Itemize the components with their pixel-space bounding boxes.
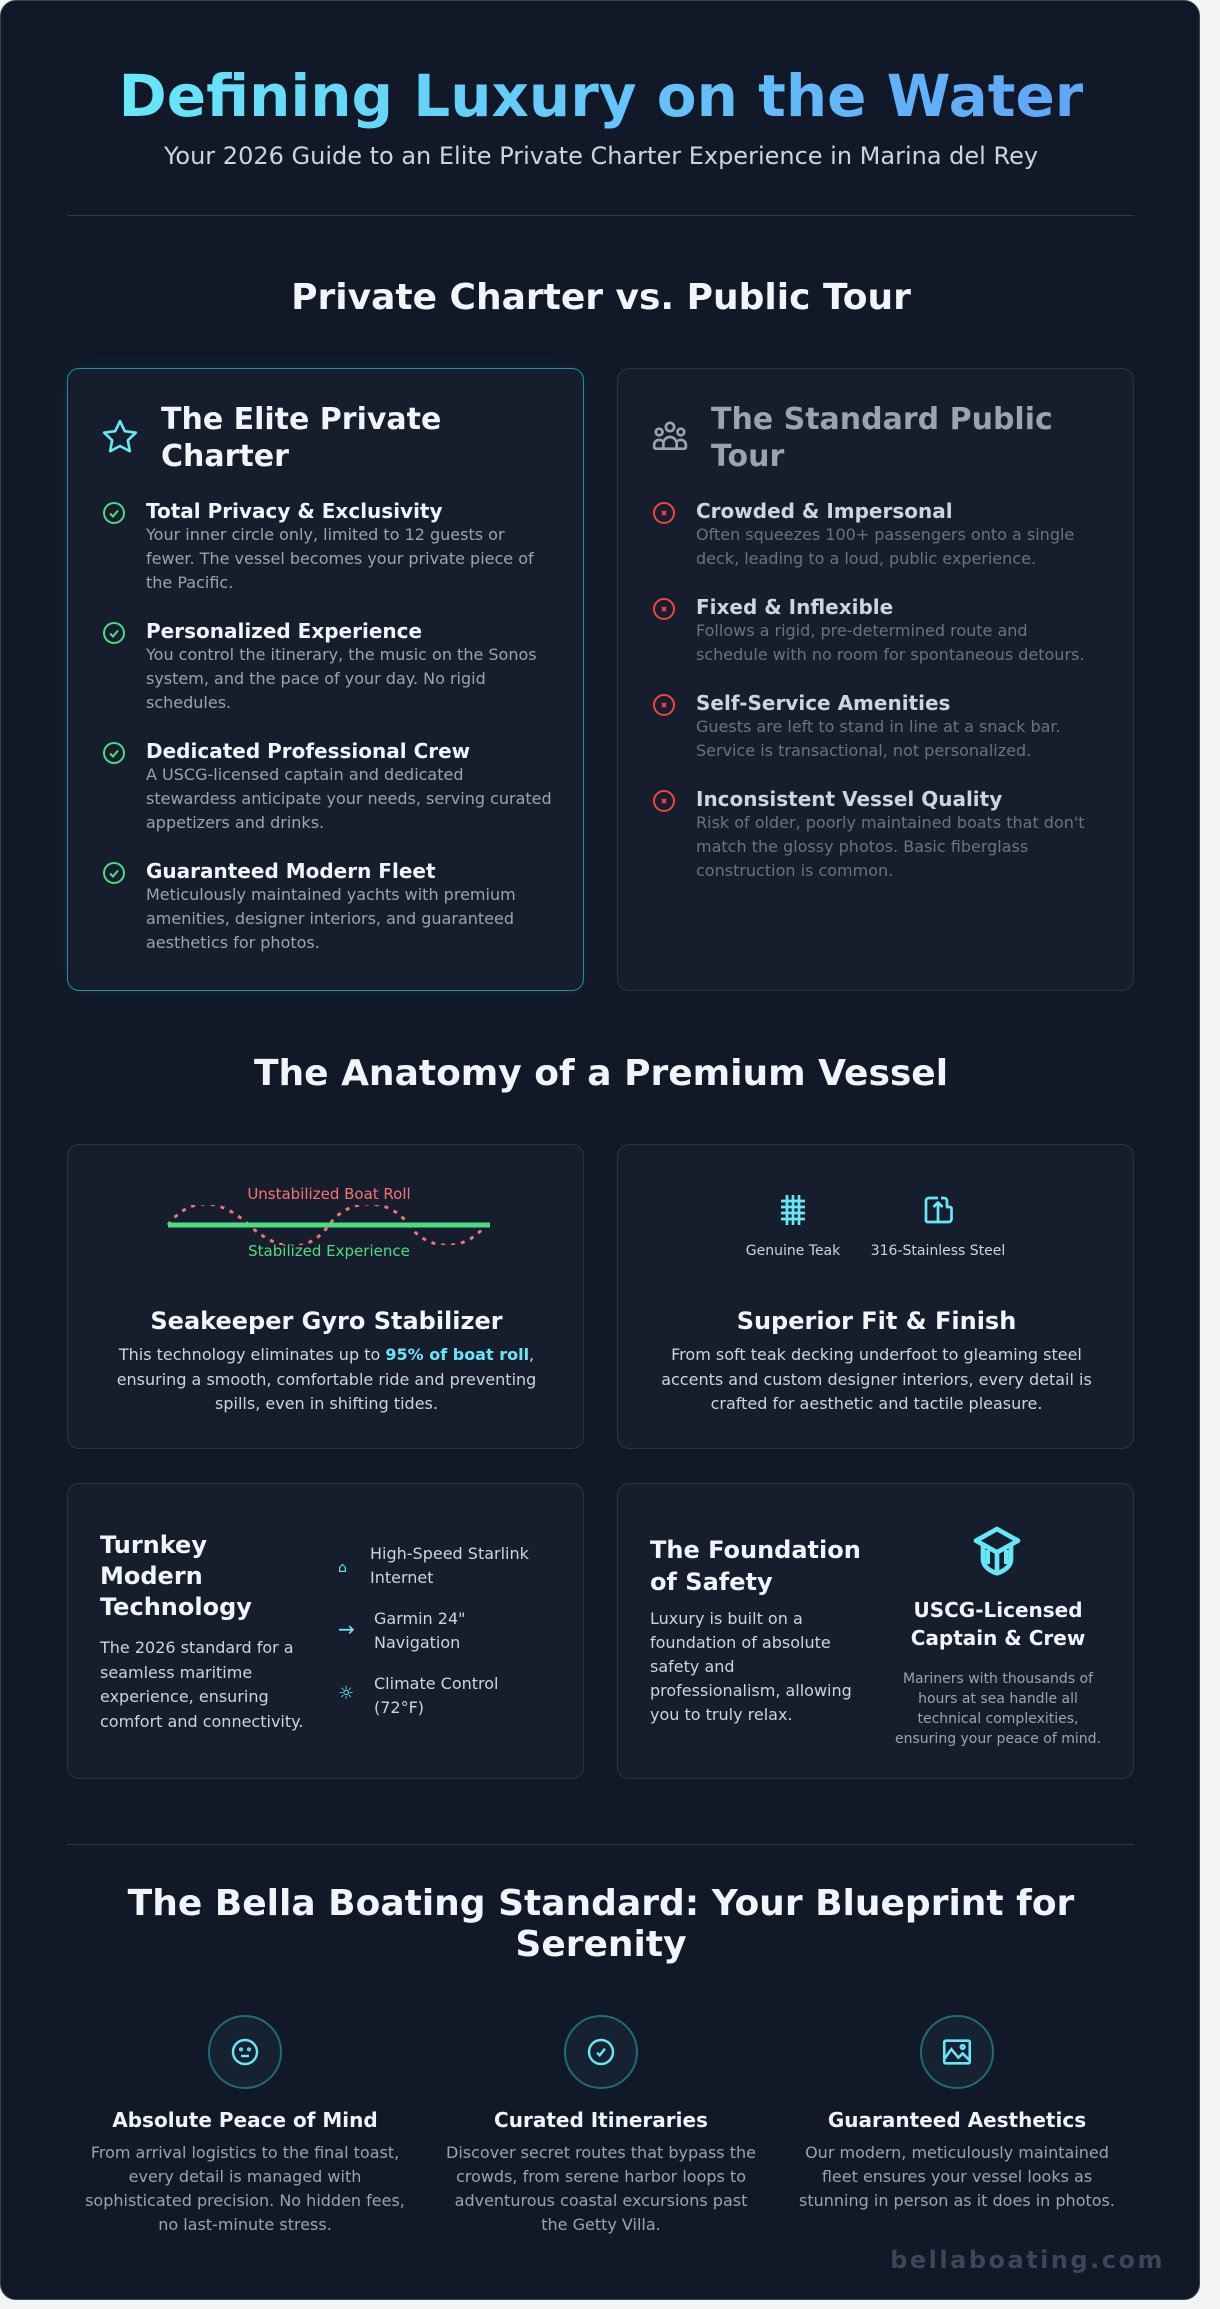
card title	[100, 1531, 252, 1621]
column: guaranteed aesthetics	[799, 2015, 1115, 2210]
item: crew: A USCG-licensed captain and dedicated stewardess anticipate your needs, serving curated appetizers and drinks.	[146, 765, 552, 832]
item: personalized	[103, 619, 537, 712]
item: quality	[653, 787, 1085, 880]
column: guaranteed aesthetics: Our modern, meticulously maintained fleet ensures your vessel looks as stunning in person as it does in photos.	[799, 2143, 1115, 2210]
crew title: USCG-Licensed	[913, 1598, 1083, 1622]
item: quality: Risk of older, poorly maintained boats that don't match the glossy photos. Basic fiberglass construction is common.	[696, 813, 1085, 880]
panel: safety	[617, 1483, 1134, 1779]
card text: This technology eliminates up to 95% of boat roll, ensuring a smooth, comfortable ride and preventing spills, even in shifting tides.	[117, 1345, 536, 1413]
item: privacy: Your inner circle only, limited to 12 guests or fewer. The vessel becomes your private piece of the Pacific.	[146, 525, 534, 592]
item: fleet: Guaranteed Modern Fleet	[146, 859, 436, 883]
card title: Technology	[100, 1593, 252, 1621]
item: self-service: Self-Service Amenities	[696, 691, 950, 715]
panel title: The Elite Private	[161, 402, 441, 437]
panel title: The Standard Public	[711, 402, 1053, 437]
item: climate: Climate Control (72°F)	[374, 1674, 498, 1717]
panel title: Charter	[161, 439, 289, 474]
panel title	[161, 402, 441, 474]
card text: Luxury is built on a foundation of absolute safety and professionalism, allowing you to truly relax.	[650, 1609, 852, 1724]
item: crowded	[653, 499, 1074, 568]
icon: check circle	[564, 2015, 638, 2089]
column: curated itineraries: Discover secret routes that bypass the crowds, from serene harbor loops to adventurous coastal excursions past the Getty Villa.	[446, 2143, 756, 2234]
icon: calm face	[208, 2015, 282, 2089]
icon: steel: 316-Stainless Steel	[871, 1243, 1005, 1259]
item: garmin: Garmin 24" Navigation	[374, 1609, 465, 1652]
panel: gyro stabilizer	[67, 1144, 584, 1449]
card title: Seakeeper Gyro Stabilizer	[150, 1307, 503, 1335]
card title: Superior Fit & Finish	[737, 1307, 1016, 1335]
panel: standard public tour	[617, 368, 1134, 991]
crew text: Mariners with thousands of hours at sea handle all technical complexities, ensuring your peace of mind.	[895, 1671, 1101, 1747]
icon: teak	[746, 1195, 840, 1259]
panel: elite private charter	[67, 368, 584, 991]
item: self-service: Guests are left to stand in line at a snack bar. Service is transactional, not personalized.	[696, 717, 1061, 760]
chart: boat roll	[166, 1185, 490, 1260]
icon: teak: Genuine Teak	[746, 1243, 840, 1259]
subtitle: Your 2026 Guide to an Elite Private Charter Experience in Marina del Rey	[164, 142, 1038, 170]
item: fleet	[103, 859, 516, 952]
heading: anatomy: The Anatomy of a Premium Vessel	[254, 1053, 948, 1094]
item: garmin: →	[338, 1617, 355, 1641]
column: peace of mind: From arrival logistics to the final toast, every detail is managed with sophisticated precision. No hidden fees, no last-minute stress.	[85, 2143, 405, 2234]
item: fixed: Follows a rigid, pre-determined route and schedule with no room for spontaneous detours.	[696, 621, 1084, 664]
panel: modern technology	[67, 1483, 584, 1779]
chart: boat roll: Unstabilized Boat Roll	[247, 1185, 411, 1203]
card title	[650, 1536, 861, 1596]
list: tech features	[338, 1544, 529, 1717]
icon: people	[652, 422, 688, 450]
crew title: Captain & Crew	[911, 1626, 1085, 1650]
heading: comparison: Private Charter vs. Public Tour	[291, 277, 911, 318]
heading: bella boating standard: The Bella Boating Standard: Your Blueprint for Serenity	[128, 1883, 1074, 1965]
column: curated itineraries	[446, 2015, 756, 2234]
item: personalized: Personalized Experience	[146, 619, 422, 643]
item: starlink: High-Speed Starlink Internet	[370, 1544, 529, 1587]
item: privacy	[103, 499, 534, 592]
card title: Modern	[100, 1562, 203, 1590]
icon: steel	[871, 1196, 1005, 1259]
card title: The Foundation	[650, 1536, 861, 1564]
column: peace of mind: Absolute Peace of Mind	[112, 2108, 378, 2132]
item: personalized: You control the itinerary, the music on the Sonos system, and the pace of your day. No rigid schedules.	[146, 645, 537, 712]
crew title	[911, 1598, 1085, 1650]
column: guaranteed aesthetics: Guaranteed Aesthetics	[828, 2108, 1086, 2132]
panel: fit & finish	[617, 1144, 1134, 1449]
item: crew: Dedicated Professional Crew	[146, 739, 470, 763]
column: curated itineraries: Curated Itineraries	[494, 2108, 708, 2132]
item: fixed: Fixed & Inflexible	[696, 595, 893, 619]
item: fleet: Meticulously maintained yachts with premium amenities, designer interiors, and guaranteed aesthetics for photos.	[146, 885, 516, 952]
card title: Turnkey	[100, 1531, 207, 1559]
item: crowded: Often squeezes 100+ passengers onto a single deck, leading to a loud, public experience.	[696, 525, 1074, 568]
card text: The 2026 standard for a seamless maritime experience, ensuring comfort and connectivity.	[100, 1638, 303, 1730]
title: Defining Luxury on the Water	[119, 62, 1083, 130]
item: crowded: Crowded & Impersonal	[696, 499, 953, 523]
icon: image	[920, 2015, 994, 2089]
card title: of Safety	[650, 1568, 773, 1596]
item: quality: Inconsistent Vessel Quality	[696, 787, 1002, 811]
panel title: Tour	[711, 439, 784, 474]
footer url: bellaboating.com	[890, 2246, 1165, 2274]
item: starlink: ⌂	[338, 1560, 347, 1576]
item: crew	[103, 739, 552, 832]
card text: From soft teak decking underfoot to gleaming steel accents and custom designer interiors, every detail is crafted for aesthetic and tactile pleasure.	[661, 1345, 1092, 1413]
panel title	[711, 402, 1053, 474]
icon: graduation cap	[974, 1526, 1020, 1576]
icon: star	[102, 420, 138, 452]
item: fixed	[653, 595, 1084, 664]
chart: boat roll: Stabilized Experience	[248, 1242, 410, 1260]
item: climate: ☼	[338, 1683, 354, 1704]
item: self-service	[653, 691, 1061, 760]
item: privacy: Total Privacy & Exclusivity	[146, 499, 443, 523]
column: peace of mind	[85, 2015, 405, 2234]
